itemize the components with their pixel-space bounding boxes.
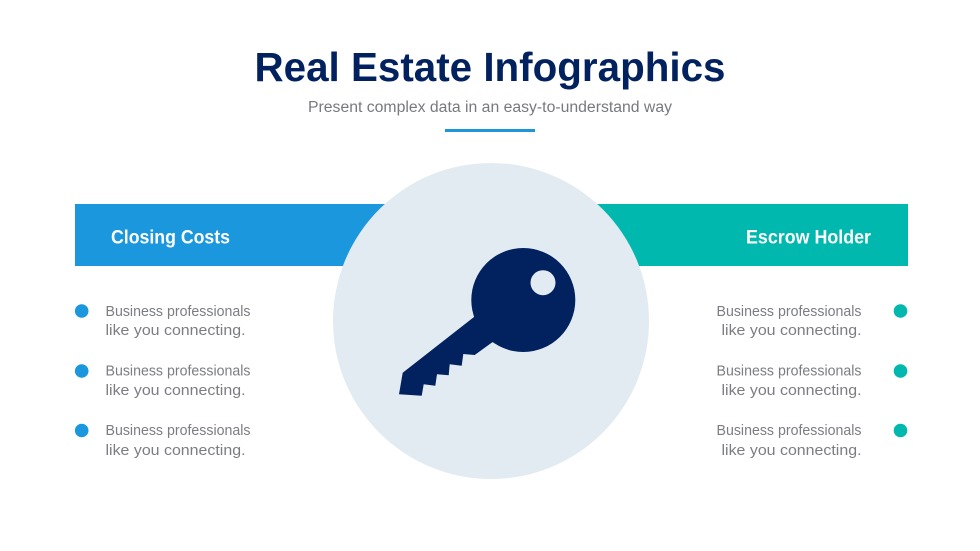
heading: escrow holder: Escrow Holder <box>746 228 872 248</box>
bullet 1 left <box>75 304 88 318</box>
heading: closing costs: Closing Costs <box>111 228 230 248</box>
text 1 left: like you connecting. <box>106 323 246 339</box>
text 3 right: Business professionals <box>716 423 862 439</box>
icon: key <box>399 248 575 396</box>
title: Real Estate Infographics <box>254 44 726 90</box>
bullet 2 right <box>894 364 907 378</box>
text 2 left: Business professionals <box>106 364 250 380</box>
panel: closing costs banner <box>75 204 405 266</box>
text 1 right: like you connecting. <box>722 323 862 339</box>
text 2 right: like you connecting. <box>722 383 862 399</box>
bullet 1 right <box>894 304 907 318</box>
title underline <box>445 129 535 132</box>
panel: escrow holder banner <box>575 204 908 266</box>
text 3 left: like you connecting. <box>106 443 246 459</box>
subtitle: Present complex data in an easy-to-understand way <box>308 99 672 116</box>
text 1 left: Business professionals <box>106 304 250 320</box>
bullet 3 left <box>75 424 88 437</box>
center circle <box>333 163 649 479</box>
text 1 right: Business professionals <box>716 304 862 320</box>
text 3 left: Business professionals <box>106 423 250 439</box>
list: escrow holder items <box>716 304 907 459</box>
bullet 3 right <box>894 424 907 437</box>
text 2 right: Business professionals <box>716 364 862 380</box>
text 2 left: like you connecting. <box>106 383 246 399</box>
text 3 right: like you connecting. <box>722 443 862 459</box>
bullet 2 left <box>75 364 88 378</box>
list: closing costs items <box>75 304 250 459</box>
